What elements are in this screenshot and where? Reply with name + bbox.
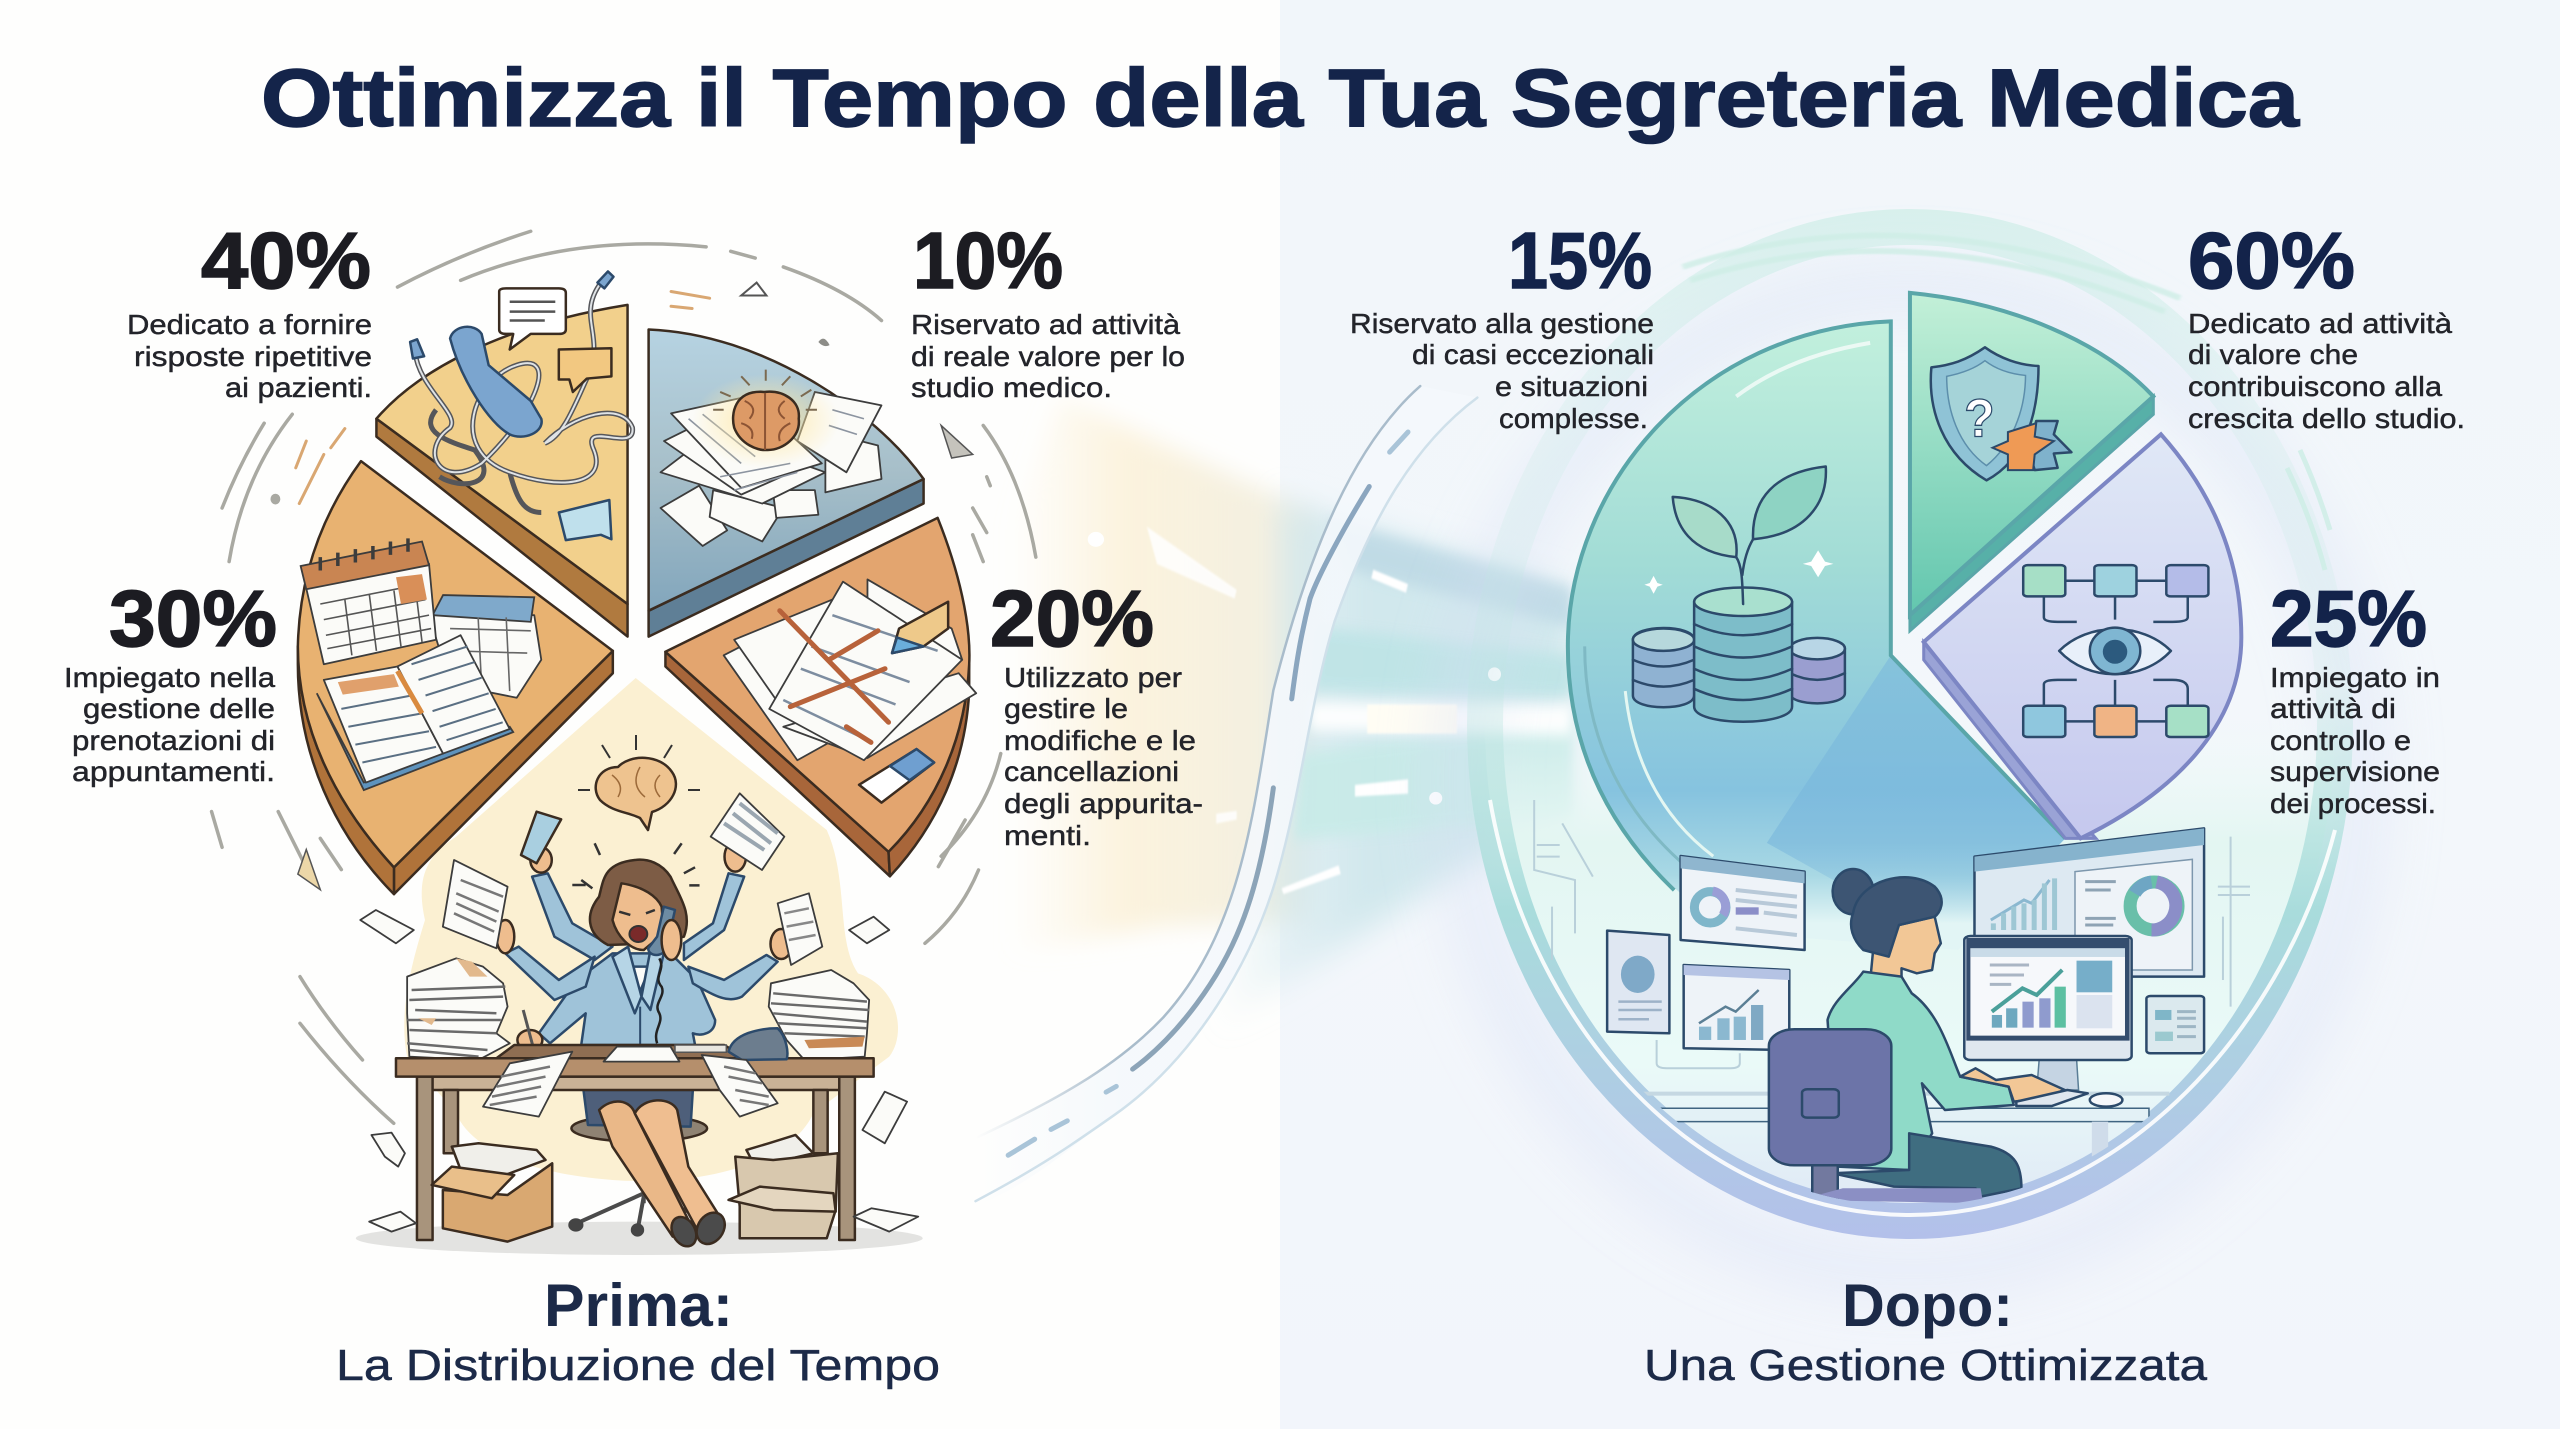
text: 10%: 10% xyxy=(913,216,1063,305)
text: 20%: gestire le xyxy=(1004,693,1128,724)
floating window: donut report xyxy=(1681,856,1805,950)
icon: open book xyxy=(317,635,513,790)
text: 25% xyxy=(2270,574,2440,819)
floating window: bar chart xyxy=(1684,965,1789,1050)
icon: puzzle piece xyxy=(1993,421,2071,470)
text: 20%: modifiche e le xyxy=(1004,725,1196,756)
text: 20%: 20% xyxy=(990,574,1154,663)
wedge: main teal with plant and coins xyxy=(1568,321,2065,950)
text: 15% xyxy=(1350,216,1654,434)
text: 40%: Dedicato a fornire xyxy=(127,309,372,340)
wedge: 40% phone and cables xyxy=(376,271,633,637)
outer glass ring xyxy=(1485,227,2335,1221)
small widget xyxy=(2146,996,2204,1053)
wedge: 20% crossed out documents xyxy=(665,518,976,876)
icon: shield with question mark xyxy=(1931,347,2039,480)
text: 10%: Riservato ad attività xyxy=(911,309,1180,340)
label: Dopo: Una Gestione Ottimizzata xyxy=(1644,1341,2208,1390)
decorative circuit lines xyxy=(1534,800,2250,1068)
skirt and legs xyxy=(583,1090,729,1248)
label: Prima: Prima: xyxy=(544,1272,733,1339)
icon: plant on coin stacks xyxy=(1633,467,1845,722)
text: 40%: ai pazienti. xyxy=(225,372,372,403)
text: 60%: di valore che xyxy=(2188,339,2358,370)
text: 25%: attività di xyxy=(2270,693,2396,724)
text: 60%: contribuiscono alla xyxy=(2188,371,2442,402)
text: 30%: gestione delle xyxy=(83,693,275,724)
wedge: 30% calendars and agenda xyxy=(298,461,613,894)
documents held xyxy=(443,860,822,965)
shards xyxy=(270,283,973,890)
motion arcs around the pie xyxy=(212,231,1036,890)
wedge: 25% lavender with process flow and eye xyxy=(1924,434,2241,838)
illustration: calm secretary at computer xyxy=(1534,800,2250,1203)
label: Prima xyxy=(336,1272,940,1390)
illustration: overwhelmed secretary at desk xyxy=(300,793,979,1255)
head with phone xyxy=(572,843,700,1043)
monitor with growth chart xyxy=(1964,936,2132,1090)
chair xyxy=(568,1013,707,1237)
text: 20%: degli appurita- xyxy=(1004,788,1203,819)
desk xyxy=(1639,1092,2169,1158)
torso with blazer xyxy=(496,920,792,1052)
text: 25%: controllo e xyxy=(2270,725,2411,756)
scene background inside ring xyxy=(1485,227,2335,1221)
text: 60%: 60% xyxy=(2188,216,2355,305)
text: 10% xyxy=(911,216,1185,403)
text: 25%: supervisione xyxy=(2270,756,2440,787)
text: 15%: e situazioni xyxy=(1495,371,1648,402)
text: 10%: studio medico. xyxy=(911,372,1112,403)
background: left half xyxy=(0,0,1280,1429)
text: 30%: Impiegato nella xyxy=(64,662,275,693)
icon: telephone handset and tangled cable xyxy=(410,271,633,540)
office chair xyxy=(1769,1029,1983,1203)
wedge: 10% brain and documents xyxy=(649,329,924,637)
text: 15%: Riservato alla gestione xyxy=(1350,308,1654,339)
icon: flow diagram with eye xyxy=(2023,565,2208,737)
cool light beams towards the right pie xyxy=(1088,501,1571,1029)
text: 60%: Dedicato ad attività xyxy=(2188,308,2452,339)
cardboard box right xyxy=(729,1135,838,1238)
text: 30%: appuntamenti. xyxy=(72,756,275,787)
text: 25%: Impiegato in xyxy=(2270,662,2440,693)
text: 20% xyxy=(990,574,1203,851)
halo around the ring xyxy=(1460,290,2360,1270)
background: right half xyxy=(1280,0,2560,1429)
label: Prima: La Distribuzione del Tempo xyxy=(336,1341,940,1390)
flying papers xyxy=(300,820,979,1232)
desk items xyxy=(483,1028,787,1117)
text: 25%: dei processi. xyxy=(2270,788,2436,819)
cardboard box left xyxy=(432,1143,552,1242)
icon: shield with question mark: ? xyxy=(1964,388,1995,448)
text: 20%: menti. xyxy=(1004,820,1091,851)
floating window: profile card xyxy=(1607,931,1669,1033)
panel: after pie chart xyxy=(1460,227,2360,1270)
wedge: 15% green with shield and puzzle xyxy=(1910,293,2153,631)
bright lower ring highlight xyxy=(1490,800,2335,1215)
text: 10%: di reale valore per lo xyxy=(911,341,1185,372)
label: Dopo xyxy=(1644,1272,2208,1390)
warm light beam on the left of the divide xyxy=(1000,398,1326,954)
text: 40%: 40% xyxy=(201,216,371,305)
text: 60%: crescita dello studio. xyxy=(2188,403,2465,434)
text: 40% xyxy=(127,216,372,403)
desk xyxy=(396,1045,874,1240)
text: 60% xyxy=(2188,216,2465,434)
large back display with donut xyxy=(1974,828,2204,977)
title: Ottimizza il Tempo della Tua Segreteria Medica xyxy=(261,53,2301,144)
icon: wall calendars xyxy=(301,538,541,698)
text: 30% xyxy=(64,574,277,787)
icon: scattered papers with glowing brain xyxy=(661,370,882,546)
text: 20%: Utilizzato per xyxy=(1004,662,1182,693)
wedge: bottom yellow xyxy=(404,678,898,1181)
text: 30%: prenotazioni di xyxy=(72,725,275,756)
text: 15%: di casi eccezionali xyxy=(1412,339,1654,370)
panel: before pie chart xyxy=(212,231,1036,1255)
text: 30%: 30% xyxy=(109,574,277,663)
back arms xyxy=(521,793,784,960)
paper stacks xyxy=(407,958,869,1060)
glass swoosh ribbon xyxy=(976,386,1477,1207)
text: 15%: complesse. xyxy=(1499,403,1648,434)
icon: papers, red crosses, pencil and eraser xyxy=(724,579,976,803)
text: 20%: cancellazioni xyxy=(1004,756,1179,787)
text: 15%: 15% xyxy=(1508,216,1652,305)
label: Dopo: Dopo: xyxy=(1842,1272,2013,1339)
woman seen from behind xyxy=(1828,869,2122,1197)
icon: worried brain xyxy=(578,735,700,830)
text: 40%: risposte ripetitive xyxy=(134,341,372,372)
text: 25%: 25% xyxy=(2270,574,2427,663)
